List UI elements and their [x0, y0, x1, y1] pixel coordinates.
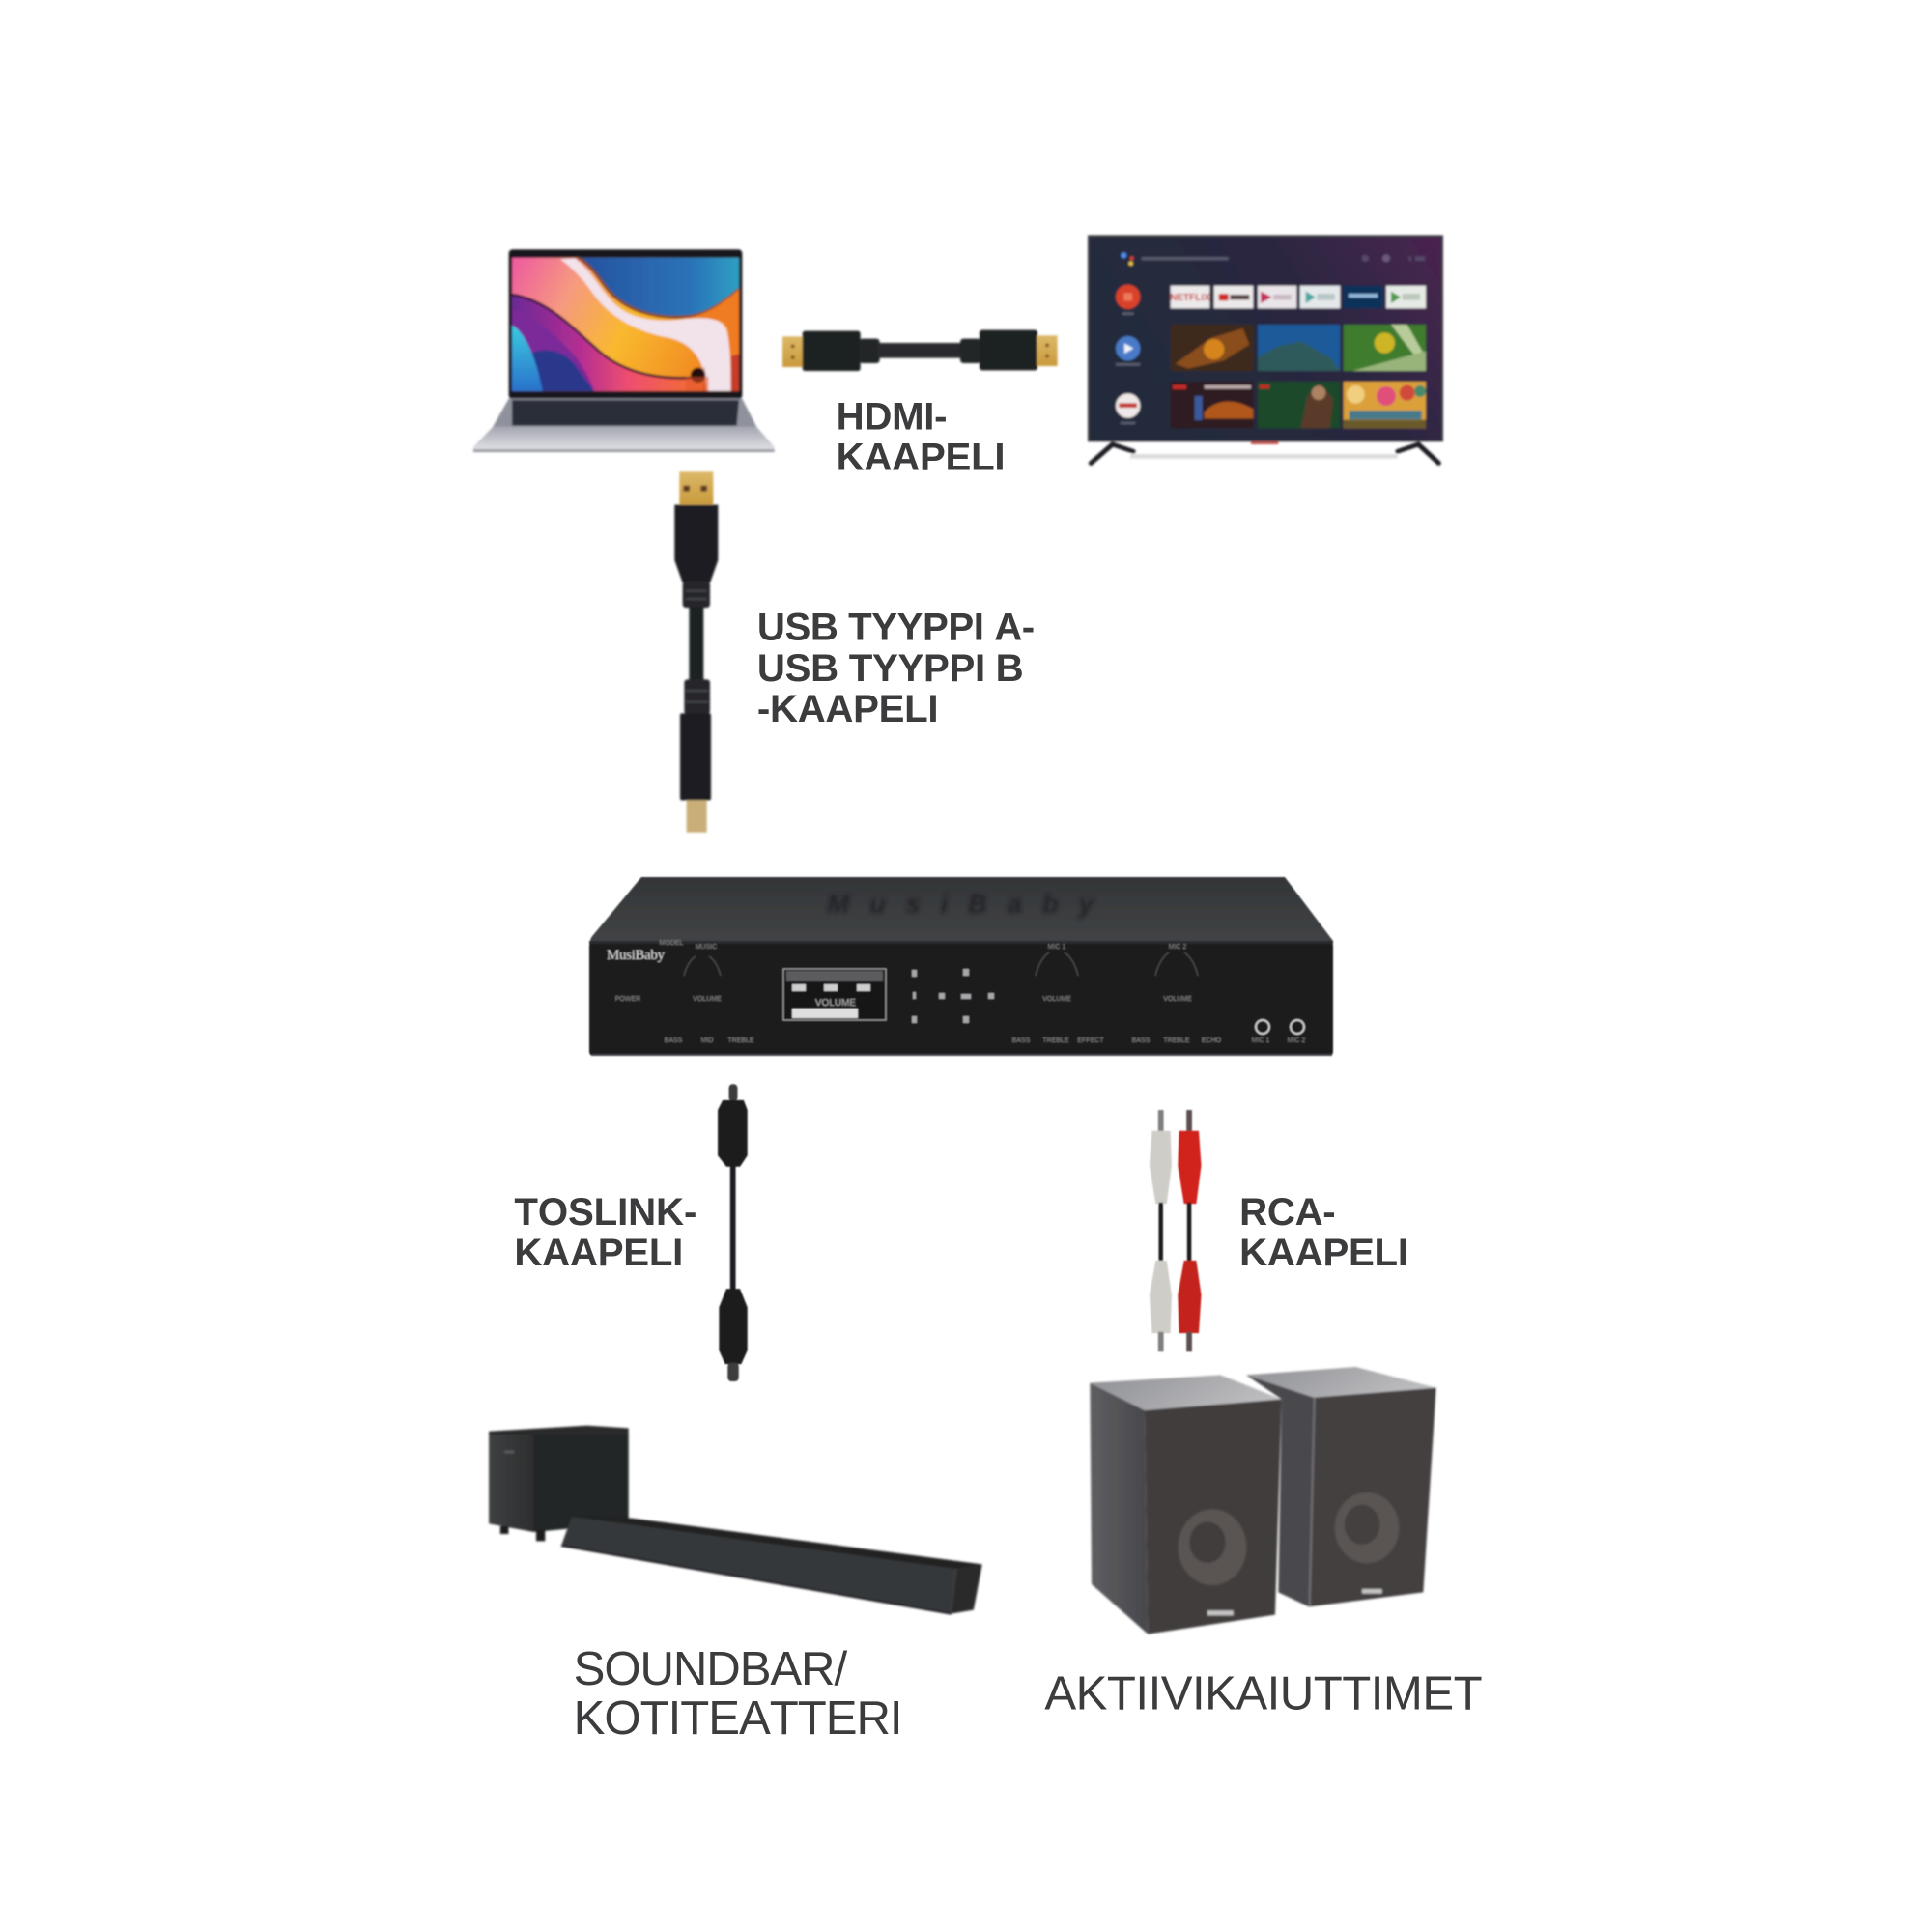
icon: television [1088, 235, 1443, 463]
left speaker [1090, 1375, 1282, 1634]
tv search bar [1121, 252, 1425, 266]
amplifier labels: TREBLE [727, 1037, 754, 1044]
amplifier labels: BASS [665, 1037, 683, 1044]
label: USB cable [757, 606, 1035, 730]
label: USB cable: USB TYYPPI A- [757, 606, 1035, 649]
right speaker [1246, 1367, 1436, 1606]
amplifier labels: MID [701, 1037, 713, 1044]
amplifier labels: MIC 2 [1169, 944, 1186, 951]
amplifier logo: MusiBaby [607, 948, 665, 963]
amplifier labels: VOLUME [1042, 996, 1071, 1003]
amplifier buttons [912, 969, 994, 1023]
amplifier labels: MIC 2 [1288, 1037, 1305, 1044]
icon: soundbar [561, 1517, 982, 1614]
label: RCA cable [1239, 1190, 1408, 1274]
amplifier display: VOLUME [815, 998, 856, 1009]
amplifier labels: VOLUME [693, 996, 722, 1003]
label: RCA cable: RCA- [1239, 1190, 1336, 1234]
laptop screen wallpaper [512, 258, 739, 391]
tv app row: NETFLIX [1170, 293, 1210, 303]
tv stand [1091, 441, 1438, 463]
label: soundbar: KOTITEATTERI [574, 1692, 903, 1745]
white plug [1150, 1110, 1172, 1351]
amplifier labels: TREBLE [1163, 1037, 1190, 1044]
amplifier [589, 877, 1333, 1056]
amplifier labels: MODEL [660, 940, 684, 947]
red plug [1178, 1110, 1202, 1351]
label: soundbar: SOUNDBAR/ [574, 1643, 847, 1695]
amplifier labels: POWER [615, 996, 640, 1003]
tv content row 2 [1171, 382, 1426, 428]
amplifier labels: ECHO [1202, 1037, 1222, 1044]
amplifier labels: TREBLE [1042, 1037, 1069, 1044]
label: HDMI cable: KAAPELI [837, 435, 1006, 478]
icon: USB cable [674, 471, 718, 833]
label: RCA cable: KAAPELI [1239, 1231, 1408, 1274]
label: USB cable: -KAAPELI [757, 687, 939, 730]
amplifier labels: EFFECT [1077, 1037, 1104, 1044]
icon: RCA cable [1150, 1110, 1202, 1351]
icon: TOSLINK cable [718, 1084, 748, 1381]
laptop lid [509, 249, 742, 399]
icon: active speakers [1090, 1367, 1436, 1634]
amplifier top logo: MusiBaby [827, 889, 1094, 919]
laptop base [473, 427, 775, 452]
amplifier labels: BASS [1132, 1037, 1151, 1044]
tv side icons [1116, 285, 1140, 424]
microphone jacks [1256, 1020, 1304, 1034]
icon: HDMI cable [782, 330, 1058, 371]
amplifier labels [615, 940, 1305, 1044]
amplifier display [783, 969, 886, 1020]
label: active speakers: AKTIIVIKAIUTTIMET [1044, 1668, 1483, 1720]
label: HDMI cable: HDMI- [837, 394, 948, 438]
label: TOSLINK cable: TOSLINK- [514, 1190, 696, 1234]
label: USB cable: USB TYYPPI B [757, 646, 1024, 690]
label: soundbar [574, 1643, 903, 1745]
amplifier labels: MIC 1 [1048, 944, 1065, 951]
labels and cables in shared scale [514, 394, 1483, 1745]
label: TOSLINK cable: KAAPELI [514, 1231, 683, 1274]
amplifier knobs [684, 952, 1198, 976]
laptop deck [493, 399, 756, 427]
amplifier labels: BASS [1012, 1037, 1031, 1044]
icon: laptop [473, 249, 775, 452]
label: TOSLINK cable [514, 1190, 696, 1274]
amplifier labels: VOLUME [1163, 996, 1192, 1003]
keyboard [512, 400, 739, 426]
amplifier labels: MUSIC [696, 944, 717, 951]
tv app row [1170, 286, 1426, 308]
label: HDMI cable [837, 394, 1006, 478]
amplifier labels: MIC 1 [1252, 1037, 1269, 1044]
icon: subwoofer [489, 1426, 629, 1541]
tv content row 1 [1171, 325, 1426, 371]
